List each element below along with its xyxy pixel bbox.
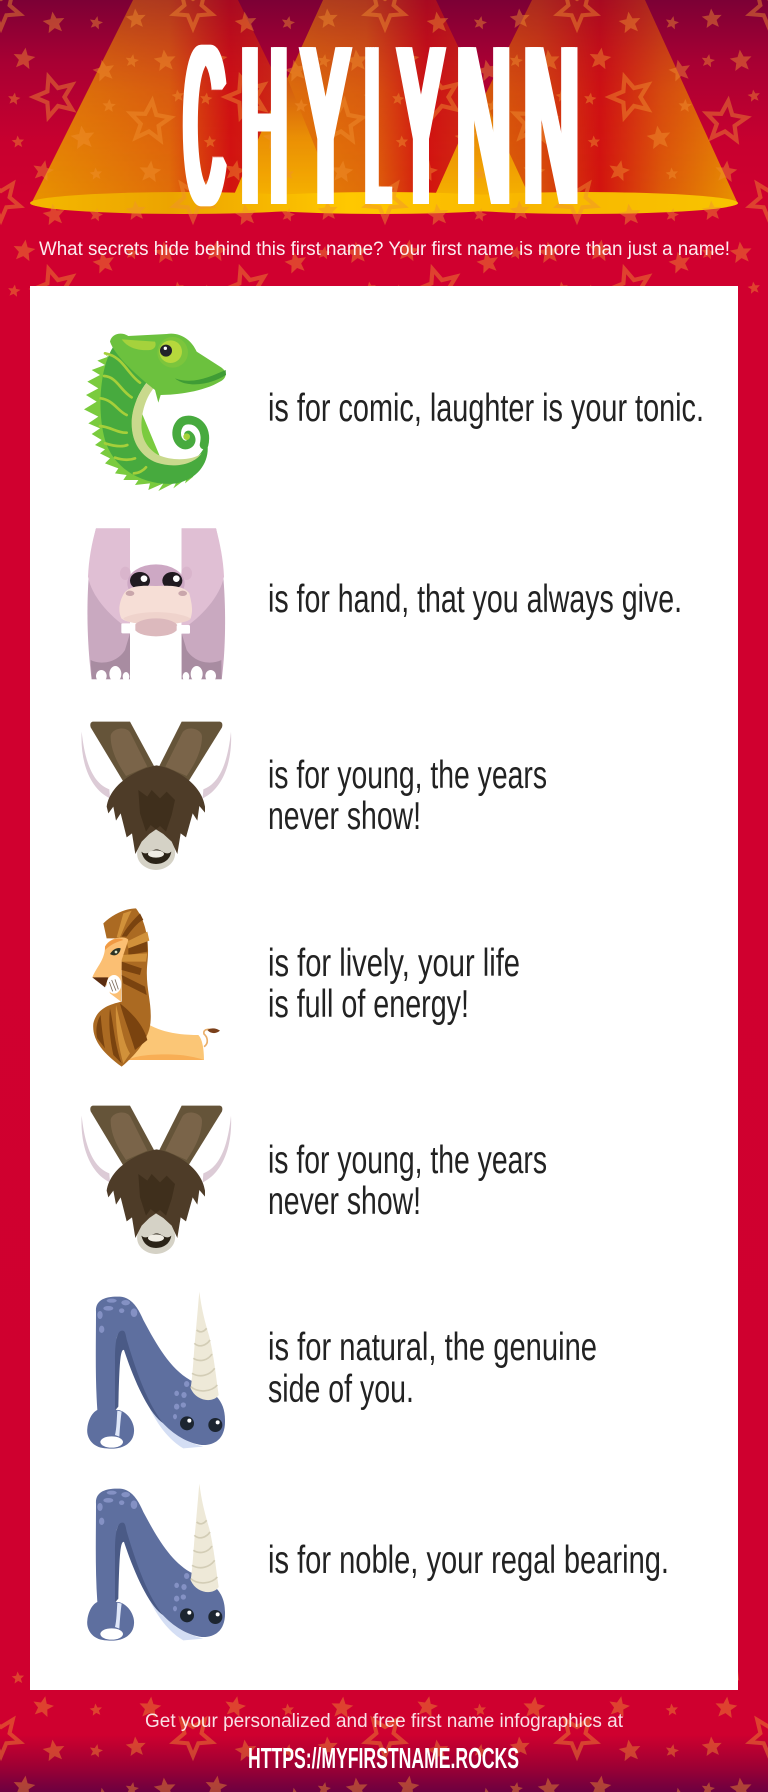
icon: narwhal letter N second — [87, 1484, 225, 1641]
title: CHYLYNN — [182, 0, 579, 253]
row: letter L — [92, 908, 520, 1067]
icon: yak letter Y second — [81, 1106, 231, 1254]
icon: hippo letter H — [87, 528, 227, 687]
row: letter Y second — [81, 1106, 547, 1254]
subtitle: What secrets hide behind this first name? Your first name is more than just a name! — [39, 239, 730, 260]
star pattern: footer — [0, 1664, 768, 1792]
text: N lines: is for natural, the genuine — [268, 1326, 597, 1369]
title: CHYLYNN: N — [524, 0, 579, 253]
title: CHYLYNN: Y — [399, 0, 443, 253]
text: L lines — [268, 942, 520, 1026]
text: N lines: side of you. — [268, 1368, 414, 1411]
text: Y lines — [268, 754, 547, 838]
row: letter C — [84, 334, 704, 491]
text: Y lines second: never show! — [268, 1180, 421, 1223]
text: L lines: is for lively, your life — [268, 942, 520, 985]
title: CHYLYNN: L — [367, 0, 388, 253]
title: CHYLYNN: C — [185, 0, 224, 253]
icon: lion letter L — [92, 908, 220, 1067]
icon: yak letter Y — [81, 722, 231, 870]
text: Y lines: is for young, the years — [268, 754, 547, 797]
text: L lines: is full of energy! — [268, 983, 469, 1026]
text: Y lines second — [268, 1139, 547, 1223]
text: Y lines second: is for young, the years — [268, 1139, 547, 1182]
row: letter N — [87, 1292, 597, 1449]
star pattern: header — [0, 0, 768, 300]
spotlights: three amber cones with base ellipses — [30, 0, 738, 214]
row: letter H — [87, 528, 682, 687]
text: N lines — [268, 1326, 597, 1411]
icon: narwhal letter N — [87, 1292, 225, 1449]
title: CHYLYNN: H — [242, 0, 287, 253]
title: CHYLYNN: N — [457, 0, 511, 253]
panel: white content card — [30, 286, 738, 1690]
title: CHYLYNN: Y — [302, 0, 350, 253]
row: letter Y — [81, 722, 547, 870]
row: letter N second — [87, 1484, 669, 1641]
footer url: HTTPS://MYFIRSTNAME.ROCKS — [248, 1743, 519, 1775]
icon: chameleon letter C — [84, 334, 226, 491]
text: Y lines: never show! — [268, 795, 421, 838]
footer text: Get your personalized and free first name infographics at — [145, 1711, 624, 1732]
